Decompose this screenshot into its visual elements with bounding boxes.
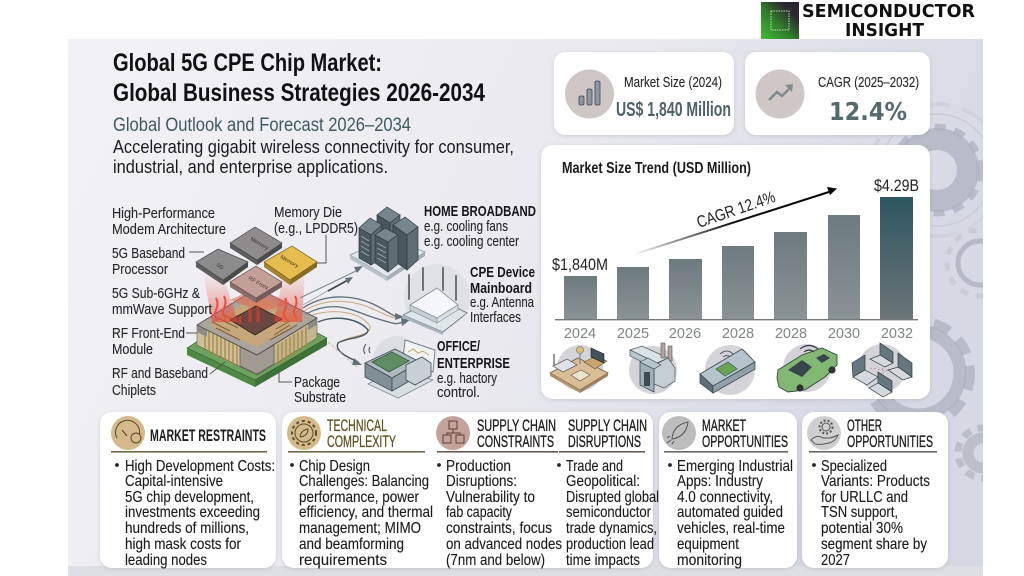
icon: factory <box>629 343 677 394</box>
chart title: Market Size Trend (USD Million) <box>562 160 751 177</box>
arrows: connectivity flows <box>300 266 410 367</box>
bullet text: constraints: constraints, focus <box>446 520 552 537</box>
label: RF and baseband chiplets <box>112 365 208 399</box>
heading: supply chain constraints <box>477 417 556 451</box>
heading <box>702 417 788 451</box>
label: office enterprise: e.g. hactory <box>437 370 497 387</box>
bullet text: constraints: Disruptions: <box>446 473 517 490</box>
label: sub-6GHz and mmWave: mmWave Support <box>112 301 213 318</box>
bullet text: Capital-intensive <box>125 473 223 490</box>
heading: supply chain disruptions: SUPPLY CHAIN <box>568 417 647 435</box>
panel: market size trend chart <box>541 145 930 399</box>
bullet text: constraints: on advanced nodes <box>446 536 562 553</box>
label: home broadband: e.g. cooling center <box>424 233 519 250</box>
chip stack illustration <box>187 227 327 387</box>
die: LPDDR5 memory: Memory <box>279 255 299 270</box>
label: CPE device mainboard: e.g. Antenna <box>470 294 534 311</box>
heading: technical complexity <box>327 417 396 451</box>
icon: networked laptops <box>852 343 912 397</box>
heading: supply chain disruptions <box>568 417 647 451</box>
label: package substrate: Package <box>294 374 340 391</box>
value label 2032: $4.29B <box>874 176 919 195</box>
panel: market size card <box>554 52 734 135</box>
bullet text <box>812 458 930 569</box>
die: memory: Memory <box>249 237 269 252</box>
bullet text: constraints: Production <box>446 458 511 475</box>
panel: other opportunities <box>802 412 948 569</box>
description <box>113 136 514 177</box>
bullet text: monitoring <box>677 552 742 569</box>
bullet text: disruptions <box>557 458 659 569</box>
heading: supply chain constraints: SUPPLY CHAIN <box>477 417 556 435</box>
icon: CPE router <box>403 264 470 335</box>
bullet text: high mask costs for <box>125 536 242 553</box>
bullet text: constraints: Vulnerability to <box>446 489 535 506</box>
icon: supply boxes <box>436 416 470 450</box>
label: office enterprise: ENTERPRISE <box>437 355 510 372</box>
logo: SEMICONDUCTOR <box>802 1 975 22</box>
bullet text: automated guided <box>677 504 783 521</box>
bullet text: segment share by <box>821 536 927 553</box>
heading: supply chain disruptions: DISRUPTIONS <box>568 433 641 451</box>
year labels: 2025 <box>617 326 649 342</box>
label: high-performance modem architecture: Modem Architecture <box>112 221 226 238</box>
logo: INSIGHT <box>845 20 925 41</box>
bullet text: technical: requirements <box>299 552 387 569</box>
value label 2024: $1,840M <box>552 255 608 274</box>
heading: technical complexity: TECHNICAL <box>327 417 387 435</box>
description: Accelerating gigabit wireless connectivity for consumer, <box>113 136 514 157</box>
bullet text: technical: efficiency, and thermal <box>299 504 433 521</box>
year labels: 2026 <box>669 326 701 342</box>
bullet text: 5G chip development, <box>125 489 254 506</box>
icon: bar signal <box>565 70 614 118</box>
heading: technical complexity: COMPLEXITY <box>327 433 396 451</box>
label: sub-6GHz and mmWave: 5G Sub-6GHz & <box>112 285 200 302</box>
icon: rocket <box>662 416 696 450</box>
die: LPDDR5 memory <box>264 246 317 285</box>
label: memory die: (e.g., LPDDR5) <box>274 220 358 237</box>
label: home broadband <box>424 203 536 250</box>
icon: enterprise equipment <box>364 336 435 398</box>
icon: home room <box>550 345 608 393</box>
bar chart <box>555 197 918 320</box>
bullet text: disruptions: Disrupted global <box>566 489 659 506</box>
bullet text: hundreds of millions, <box>125 520 249 537</box>
die: 5G baseband: 5G <box>215 263 224 271</box>
bullet text: equipment <box>677 536 739 553</box>
title <box>113 49 485 107</box>
title: Global 5G CPE Chip Market: <box>113 49 382 77</box>
arrow: CAGR trend <box>632 187 837 255</box>
heading: supply chain constraints: CONSTRAINTS <box>477 433 554 451</box>
heat glow <box>203 270 305 322</box>
label: office enterprise: control. <box>437 384 480 401</box>
panel: technical and supply chain <box>282 412 659 569</box>
year labels: 2024 <box>564 326 596 342</box>
label: home broadband: HOME BROADBAND <box>424 203 536 220</box>
bullet text <box>668 458 793 569</box>
market size label: Market Size (2024) <box>624 74 722 91</box>
label: sub-6GHz and mmWave <box>112 285 213 318</box>
bullet text: 4.0 connectivity, <box>677 489 773 506</box>
year labels <box>564 326 913 342</box>
heading: MARKET <box>702 417 746 435</box>
bullet text: Emerging Industrial <box>677 458 793 475</box>
bullet text: for URLLC and <box>821 489 908 506</box>
panel: market restraints <box>100 412 276 569</box>
description: industrial, and enterprise applications. <box>113 156 388 177</box>
label: package substrate <box>294 374 346 406</box>
label: office enterprise: OFFICE/ <box>437 338 481 355</box>
label: home broadband: e.g. cooling fans <box>424 218 508 235</box>
label: CPE device mainboard <box>470 264 535 326</box>
CAGR value: 12.4% <box>829 97 907 126</box>
bullet text: technical: Chip Design <box>299 458 370 475</box>
label: office enterprise <box>437 338 510 401</box>
bullet text: Specialized <box>821 458 887 475</box>
year labels: 2028 <box>775 326 807 342</box>
label: memory die: Memory Die <box>274 204 342 221</box>
bullet text: potential 30% <box>821 520 903 537</box>
icon: rising trend <box>756 70 804 118</box>
label: 5G baseband processor: Processor <box>112 261 168 278</box>
die: RF front-end: RF Front <box>247 276 269 292</box>
bullet text: 2027 <box>821 552 850 569</box>
bullet text: Variants: Products <box>821 473 930 490</box>
label: CPE device mainboard: CPE Device <box>470 264 535 281</box>
label: RF and baseband chiplets: RF and Baseband <box>112 365 208 382</box>
title: Global Business Strategies 2026-2034 <box>113 79 485 107</box>
bullet text: technical <box>290 458 433 569</box>
bullet text: technical: and beamforming <box>299 536 404 553</box>
year labels: 2028 <box>722 326 754 342</box>
panel: market opportunities <box>659 412 797 569</box>
bullet text: Apps: Industry <box>677 473 763 490</box>
label: RF front-end module <box>112 325 185 358</box>
bullet text: constraints <box>437 458 562 569</box>
heading <box>847 417 933 451</box>
bullet text: TSN support, <box>821 504 898 521</box>
label: 5G baseband processor: 5G Baseband <box>112 245 185 262</box>
bullet text: constraints: fab capacity <box>446 504 512 521</box>
CAGR label: CAGR (2025–2032) <box>818 74 919 91</box>
heading: OPPORTUNITIES <box>847 433 933 451</box>
icon: hand with gear <box>807 416 841 450</box>
leader lines <box>186 235 326 382</box>
heading: MARKET RESTRAINTS <box>150 427 266 445</box>
bullet text: disruptions: production lead <box>566 536 654 553</box>
label: high-performance modem architecture: High-Performance <box>112 205 215 222</box>
panel: CAGR card <box>745 52 930 135</box>
bullet text: disruptions: Trade and <box>566 458 623 475</box>
label: 5G baseband processor <box>112 245 185 278</box>
bullet text: technical: performance, power <box>299 489 420 506</box>
label: RF front-end module: RF Front-End <box>112 325 185 342</box>
bullet text: leading nodes <box>125 552 207 569</box>
icon: gateway device <box>700 345 755 395</box>
year labels: 2032 <box>881 326 913 342</box>
icon: gear with chip <box>287 416 321 450</box>
bullet text: disruptions: semiconductor <box>566 504 652 521</box>
CAGR annotation: CAGR 12.4% <box>694 188 778 232</box>
heading: OPPORTUNITIES <box>702 433 788 451</box>
market size value: US$ 1,840 Million <box>616 99 731 121</box>
die: memory <box>230 227 282 265</box>
label: memory die <box>274 204 358 237</box>
label: RF and baseband chiplets: Chiplets <box>112 382 156 399</box>
bullet text: disruptions: time impacts <box>566 552 640 569</box>
die: RF front-end <box>230 266 282 303</box>
bullet text: disruptions: Geopolitical: <box>566 473 640 490</box>
heading: OTHER <box>847 417 882 435</box>
bullet text: constraints: (7nm and below) <box>446 552 545 569</box>
label: RF front-end module: Module <box>112 341 153 358</box>
bullet text: investments exceeding <box>125 504 260 521</box>
chip package with wiring <box>197 288 317 375</box>
bullet text: vehicles, real-time <box>677 520 785 537</box>
icon: connected car <box>777 344 837 392</box>
bullet text: technical: management; MIMO <box>299 520 421 537</box>
package substrate <box>187 302 327 387</box>
year labels: 2030 <box>828 326 860 342</box>
subtitle: Global Outlook and Forecast 2026–2034 <box>113 115 411 136</box>
label: CPE device mainboard: Mainboard <box>470 280 532 297</box>
label: CPE device mainboard: Interfaces <box>470 309 521 326</box>
icon: gauge <box>111 416 145 450</box>
die: 5G baseband <box>196 249 248 285</box>
bullet text: High Development Costs: <box>125 458 275 475</box>
label: high-performance modem architecture <box>112 205 226 238</box>
icon: server racks <box>350 207 425 281</box>
bullet text: disruptions: trade dynamics, <box>566 520 657 537</box>
bullet text: technical: Challenges: Balancing <box>299 473 429 490</box>
label: package substrate: Substrate <box>294 389 346 406</box>
logo <box>761 1 975 41</box>
bullet text <box>115 458 275 569</box>
